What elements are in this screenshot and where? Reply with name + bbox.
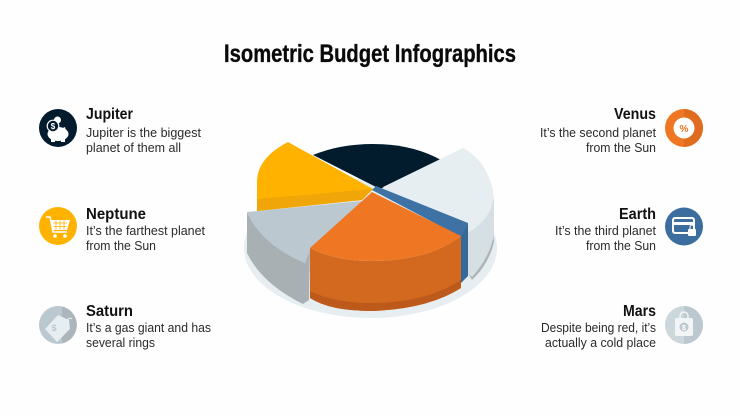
icon: price tag: $ bbox=[51, 323, 57, 333]
description: It’s the farthest planet bbox=[86, 224, 206, 238]
heading: Saturn bbox=[86, 303, 133, 320]
description: It’s the second planet bbox=[540, 126, 657, 140]
description: Despite being red, it’s bbox=[541, 321, 656, 335]
slice: blue bbox=[372, 186, 468, 283]
item: Earth bbox=[555, 206, 703, 253]
item: Jupiter bbox=[39, 106, 202, 155]
description bbox=[555, 224, 657, 253]
heading: Jupiter bbox=[86, 106, 133, 123]
icon: piggy bank bbox=[39, 109, 77, 147]
item: Mars bbox=[541, 303, 703, 350]
description bbox=[86, 126, 202, 155]
heading: Venus bbox=[614, 106, 656, 123]
icon: piggy bank: $ bbox=[51, 122, 56, 131]
description: from the Sun bbox=[586, 239, 656, 253]
icon: shopping bag: $ bbox=[682, 325, 686, 332]
description: several rings bbox=[86, 336, 155, 350]
description: It’s a gas giant and has bbox=[86, 321, 211, 335]
heading: Neptune bbox=[86, 206, 146, 223]
icon: discount badge: % bbox=[680, 124, 689, 135]
pie chart bbox=[244, 142, 497, 318]
item: Venus bbox=[540, 106, 703, 155]
slice: navy bbox=[313, 144, 441, 189]
description: Jupiter is the biggest bbox=[86, 126, 202, 140]
description: from the Sun bbox=[586, 141, 656, 155]
description: actually a cold place bbox=[545, 336, 656, 350]
icon: discount badge bbox=[665, 109, 703, 147]
slice: light grey bbox=[383, 148, 494, 280]
icon: price tag bbox=[39, 306, 77, 344]
description bbox=[540, 126, 657, 155]
icon: credit card bbox=[665, 208, 703, 246]
icon: cart bbox=[39, 207, 77, 245]
item: Saturn bbox=[39, 303, 211, 350]
description: from the Sun bbox=[86, 239, 156, 253]
slice: grey bbox=[247, 201, 362, 304]
slice: orange bbox=[310, 192, 461, 311]
title: Isometric Budget Infographics bbox=[224, 40, 516, 68]
chart base bbox=[244, 178, 497, 318]
description bbox=[86, 224, 206, 253]
description: planet of them all bbox=[86, 141, 181, 155]
description: It’s the third planet bbox=[555, 224, 657, 238]
icon: shopping bag bbox=[665, 306, 703, 344]
slice: yellow bbox=[257, 142, 373, 211]
heading: Earth bbox=[619, 206, 656, 223]
item: Neptune bbox=[39, 206, 206, 253]
heading: Mars bbox=[623, 303, 656, 320]
description bbox=[86, 321, 211, 350]
description bbox=[541, 321, 656, 350]
